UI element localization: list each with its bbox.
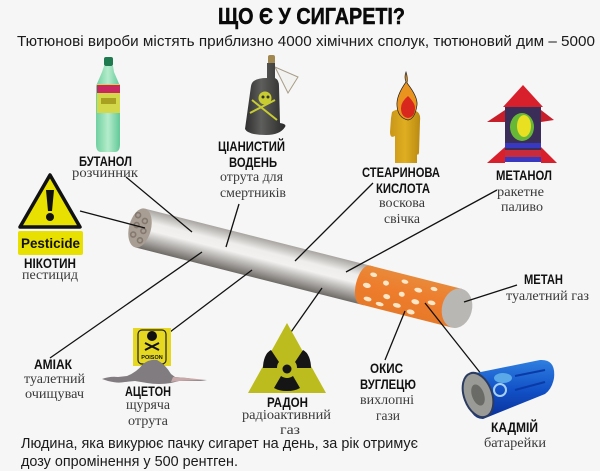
icon: radiation triangle bbox=[248, 323, 326, 393]
label: cadmium: КАДМІЙ bbox=[491, 418, 538, 435]
label: ammonia: туалетний bbox=[24, 372, 85, 387]
label: methanol: МЕТАНОЛ bbox=[496, 167, 552, 183]
icon: butanol bottle bbox=[96, 57, 120, 152]
leader lines bbox=[50, 177, 517, 375]
label: butanol: БУТАНОЛ bbox=[79, 153, 132, 169]
icon: battery bbox=[457, 360, 554, 421]
label: stearic acid: СТЕАРИНОВА bbox=[362, 164, 440, 180]
label: ammonia: АМІАК bbox=[34, 356, 72, 372]
label: cadmium bbox=[484, 418, 547, 451]
footer note: дозу опромінення у 500 рентген. bbox=[21, 453, 238, 470]
icon: poison sign and rat: POISON bbox=[141, 355, 163, 361]
label: methane: туалетний газ bbox=[506, 289, 589, 304]
icon: rocket bbox=[487, 85, 557, 163]
label: hydrogen cyanide: смертників bbox=[220, 186, 286, 201]
icon: candle bbox=[390, 72, 420, 163]
label: acetone: АЦЕТОН bbox=[125, 383, 171, 399]
label: methanol: паливо bbox=[501, 200, 543, 215]
label: acetone: щуряча bbox=[126, 398, 171, 413]
label: nicotine: пестицид bbox=[22, 268, 78, 283]
label: nicotine: НІКОТИН bbox=[24, 255, 76, 271]
label: acetone: отрута bbox=[128, 414, 169, 429]
label: radon: газ bbox=[280, 423, 301, 438]
label: methane bbox=[506, 271, 589, 304]
label: butanol: розчинник bbox=[72, 166, 138, 181]
title: ЩО Є У СИГАРЕТІ? bbox=[218, 3, 405, 29]
cigarette bbox=[124, 206, 476, 331]
label: stearic acid: свічка bbox=[384, 212, 421, 227]
icon: poison bottle bbox=[245, 55, 298, 135]
label: stearic acid: воскова bbox=[379, 196, 426, 211]
label: butanol bbox=[72, 153, 138, 181]
label: nicotine bbox=[22, 255, 78, 283]
label: acetone bbox=[125, 383, 171, 429]
label: carbon monoxide bbox=[360, 360, 416, 424]
label: ammonia bbox=[24, 356, 85, 402]
footer note: Людина, яка викурює пачку сигарет на день, за рік отримує bbox=[21, 435, 418, 452]
label: hydrogen cyanide: отрута для bbox=[220, 170, 284, 185]
label: hydrogen cyanide: ЦІАНИСТИЙ bbox=[218, 137, 285, 154]
subtitle: Тютюнові вироби містять приблизно 4000 хімічних сполук, тютюновий дим – 5000 bbox=[17, 33, 595, 50]
label: hydrogen cyanide: ВОДЕНЬ bbox=[229, 154, 277, 170]
label: methane: МЕТАН bbox=[524, 271, 563, 287]
icon: pesticide warning: Pesticide bbox=[21, 235, 80, 251]
label: hydrogen cyanide bbox=[218, 137, 286, 201]
label: methanol bbox=[496, 167, 552, 215]
label: radon bbox=[242, 394, 332, 438]
label: radon: РАДОН bbox=[267, 394, 308, 410]
label: stearic acid bbox=[362, 164, 440, 227]
label: radon: радіоактивний bbox=[242, 408, 332, 423]
icon: poison sign and rat bbox=[102, 328, 207, 384]
label: carbon monoxide: гази bbox=[376, 409, 400, 424]
label: carbon monoxide: ВУГЛЕЦЮ bbox=[360, 376, 416, 392]
footer note bbox=[21, 435, 418, 470]
label: cadmium: батарейки bbox=[484, 436, 547, 451]
icon: pesticide warning bbox=[18, 175, 83, 255]
label: stearic acid: КИСЛОТА bbox=[376, 180, 430, 196]
label: carbon monoxide: вихлопні bbox=[360, 393, 414, 408]
label: methanol: ракетне bbox=[497, 185, 544, 200]
label: carbon monoxide: ОКИС bbox=[370, 360, 403, 376]
label: ammonia: очищувач bbox=[25, 387, 84, 402]
